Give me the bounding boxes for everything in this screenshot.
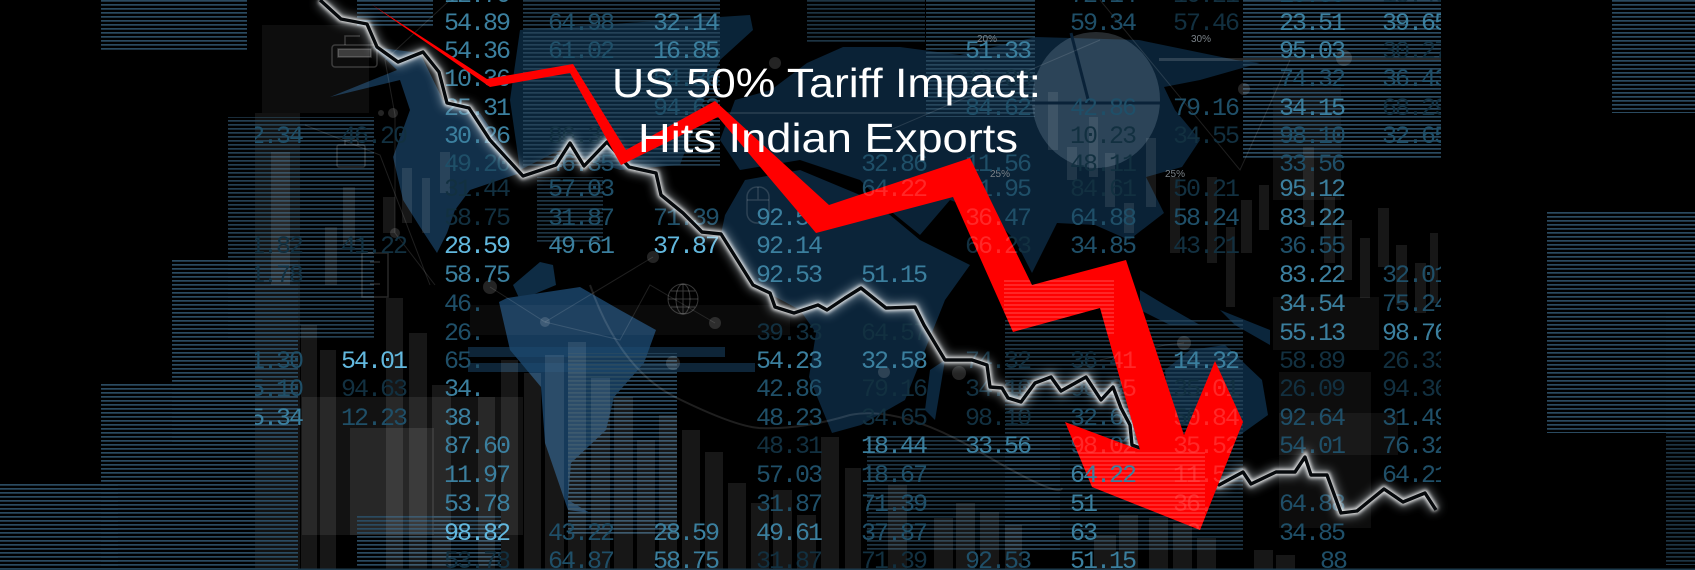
numbers column 5: 37.87 [653, 232, 719, 261]
numbers column 11: 34.54 [1279, 290, 1345, 319]
bottom edge line [0, 568, 1695, 570]
numbers column 7: 71.39 [861, 490, 927, 519]
numbers column 11: 33.56 [1279, 150, 1345, 179]
title [612, 60, 1041, 161]
numbers showing through arrow: 88.23 [1173, 519, 1239, 548]
numbers column 8: 51.33 [965, 37, 1031, 66]
numbers column 11: 34.85 [1279, 519, 1345, 548]
numbers column 10: 58.24 [1173, 204, 1239, 233]
numbers column 8: 84.62 [965, 94, 1031, 123]
numbers showing through arrow: 35.01 [1173, 375, 1239, 404]
icon: globe [668, 284, 698, 314]
numbers column 7: 34.65 [861, 404, 927, 433]
numbers column 4: 64.98 [548, 9, 614, 38]
numbers column 11: 74.32 [1279, 65, 1345, 94]
numbers column 11: 23.51 [1279, 9, 1345, 38]
numbers column 10: 50.84 [1173, 404, 1239, 433]
numbers showing through arrow: 96.35 [1070, 375, 1136, 404]
numbers showing through arrow: 36.47 [965, 204, 1031, 233]
numbers column 10: 35.01 [1173, 375, 1239, 404]
world map [330, 15, 1270, 513]
numbers showing through arrow: 36.27 [1173, 490, 1239, 519]
numbers column 9: 10.23 [1070, 122, 1136, 151]
numbers column 8: 66.23 [965, 232, 1031, 261]
numbers column 12 [1384, 13, 1441, 482]
numbers column 3: 65. [444, 347, 483, 376]
numbers column 7: 51.15 [861, 261, 927, 290]
pie chart circle [1032, 32, 1160, 168]
numbers column 12: 32.01 [1382, 261, 1448, 290]
numbers column 11: 26.09 [1279, 375, 1345, 404]
numbers column 1: 31.82 [237, 232, 303, 261]
numbers column 11: 55.13 [1279, 319, 1345, 348]
numbers column 3: 87.60 [444, 432, 510, 461]
numbers column 9: 42.86 [1070, 94, 1136, 123]
numbers column 11: 95.03 [1279, 37, 1345, 66]
numbers column 9: 96.35 [1070, 375, 1136, 404]
numbers column 1: 41.78 [237, 261, 303, 290]
percent labels [977, 34, 1211, 180]
numbers column 5: 54.36 [653, 65, 719, 94]
numbers column 6: 42.86 [756, 375, 822, 404]
numbers column 12: 26.33 [1382, 347, 1448, 376]
red falling arrow [371, 4, 1243, 530]
numbers column 10: 14.32 [1173, 347, 1239, 376]
numbers column 11: 36.55 [1279, 232, 1345, 261]
numbers column 3: 38. [444, 404, 483, 433]
numbers column 9: 32.65 [1070, 404, 1136, 433]
numbers column 12: 76.32 [1382, 432, 1448, 461]
numbers column 11 [1279, 9, 1347, 570]
numbers column 6 [756, 204, 822, 570]
black falling line [320, 0, 1436, 513]
numbers column 7: 32.86 [861, 150, 927, 179]
number table [237, 0, 1448, 570]
numbers column 9: 36.41 [1070, 347, 1136, 376]
numbers column 12: 30.27 [1382, 37, 1448, 66]
numbers column 5: 32.14 [653, 9, 719, 38]
numbers column 1 [255, 126, 303, 425]
numbers column 2: 41.22 [341, 232, 407, 261]
numbers column 4: 31.87 [548, 204, 614, 233]
numbers column 6: 92.14 [756, 232, 822, 261]
numbers column 4: 43.22 [548, 519, 614, 548]
numbers showing through arrow: 98.02 [1070, 432, 1136, 461]
numbers column 1: 65.10 [237, 375, 303, 404]
numbers column 3: 54.89 [444, 9, 510, 38]
numbers column 3: 31.44 [444, 175, 510, 204]
numbers column 9: 63 [1070, 519, 1097, 548]
outer glow of falling line [320, 0, 1436, 513]
numbers column 6: 49.61 [756, 519, 822, 548]
numbers column 10: 57.46 [1173, 9, 1239, 38]
numbers column 4: 46.35 [548, 150, 614, 179]
numbers column 12: 75.24 [1382, 290, 1448, 319]
numbers column 4 [548, 9, 614, 570]
numbers column 3: 98.82 [444, 519, 510, 548]
percent labels: 30% [1191, 34, 1211, 45]
numbers column 6: 39.33 [756, 319, 822, 348]
numbers column 2: 46.20 [341, 122, 407, 151]
numbers column 11: 92.64 [1279, 404, 1345, 433]
bar chart [271, 152, 1295, 570]
numbers column 4: 49.61 [548, 232, 614, 261]
numbers column 3: 46. [444, 290, 483, 319]
numbers column 10 [1173, 9, 1239, 433]
numbers column 2: 54.01 [341, 347, 407, 376]
numbers column 5: 28.59 [653, 519, 719, 548]
network lines and curve [305, 0, 1290, 490]
numbers column 6: 57.03 [756, 461, 822, 490]
numbers column 11: 34.15 [1279, 94, 1345, 123]
percent labels: 25% [990, 169, 1010, 180]
numbers column 8: 16.08 [965, 65, 1031, 94]
percent labels: 25% [1165, 169, 1185, 180]
title: Hits Indian Exports [638, 115, 1018, 161]
numbers showing through arrow: 11.52 [1173, 461, 1239, 490]
numbers showing through arrow: 66.23 [965, 232, 1031, 261]
numbers showing through arrow: 35.52 [1173, 432, 1239, 461]
numbers showing through arrow [861, 175, 1239, 548]
numbers column 3: 30.26 [444, 122, 510, 151]
title: US 50% Tariff Impact: [612, 60, 1041, 106]
numbers column 9: 34.85 [1070, 232, 1136, 261]
numbers column 9 [1070, 9, 1136, 570]
icon: keyboard [332, 36, 377, 67]
numbers column 5: 94.63 [653, 94, 719, 123]
numbers column 3: 49.20 [444, 150, 510, 179]
numbers column 9: 51 [1070, 490, 1097, 519]
white glow of falling line [320, 0, 1436, 513]
icon: device stack [362, 253, 388, 297]
numbers column 11: 83.22 [1279, 261, 1345, 290]
numbers column 3: 25.31 [444, 94, 510, 123]
numbers column 5 [653, 9, 719, 570]
numbers column 7: 18.67 [861, 461, 927, 490]
numbers column 8: 11.95 [965, 175, 1031, 204]
numbers column 8 [965, 37, 1031, 570]
numbers column 4: 61.02 [548, 37, 614, 66]
number over arrow: 64.22 [1070, 461, 1136, 490]
numbers column 7 [861, 150, 927, 570]
numbers column 7: 18.44 [861, 432, 927, 461]
numbers column 9: 84.61 [1070, 175, 1136, 204]
numbers column 12: 32.65 [1382, 122, 1448, 151]
numbers column 12: 68.29 [1382, 94, 1448, 123]
numbers column 1: 81.30 [237, 347, 303, 376]
icon: bag [337, 140, 365, 167]
numbers column 9: 48.11 [1070, 150, 1136, 179]
numbers showing through arrow: 64.22 [861, 175, 927, 204]
gray panels [255, 25, 1441, 570]
numbers column 3: 28.59 [444, 232, 510, 261]
numbers column 10: 34.55 [1173, 122, 1239, 151]
numbers column 5: 16.85 [653, 37, 719, 66]
numbers column 12: 98.76 [1382, 319, 1448, 348]
numbers column 3: 54.36 [444, 37, 510, 66]
candlestick chart [1048, 92, 1438, 313]
numbers column 11: 54.01 [1279, 432, 1345, 461]
icon: computer mouse [747, 187, 769, 223]
numbers column 3 [444, 9, 510, 570]
numbers column 8: 74.32 [965, 347, 1031, 376]
numbers column 6: 31.87 [756, 490, 822, 519]
numbers column 11: 58.89 [1279, 347, 1345, 376]
numbers column 8: 98.10 [965, 404, 1031, 433]
numbers column 9: 98.02 [1070, 432, 1136, 461]
numbers column 8: 33.56 [965, 432, 1031, 461]
numbers column 12: 94.36 [1382, 375, 1448, 404]
numbers column 9: 59.34 [1070, 9, 1136, 38]
numbers column 3: 10.36 [444, 65, 510, 94]
blue horizontal bands [468, 347, 755, 372]
numbers column 4: 57.03 [548, 175, 614, 204]
numbers column 3: 26. [444, 319, 483, 348]
numbers column 3: 58.75 [444, 261, 510, 290]
numbers column 8: 11.56 [965, 150, 1031, 179]
numbers column 11: 83.22 [1279, 204, 1345, 233]
numbers column 7: 64.22 [861, 175, 927, 204]
numbers column 4: 86.34 [548, 122, 614, 151]
percent labels: 20% [977, 34, 997, 45]
numbers top clipped row [446, 0, 1441, 2]
network nodes [378, 50, 1352, 380]
numbers column 5: 71.39 [653, 204, 719, 233]
numbers column 3: 58.75 [444, 204, 510, 233]
numbers column 6: 48.23 [756, 404, 822, 433]
numbers column 12: 64.21 [1382, 461, 1448, 490]
numbers column 10: 50.21 [1173, 175, 1239, 204]
numbers column 12: 39.65 [1382, 9, 1448, 38]
numbers column 9: 64.88 [1070, 204, 1136, 233]
numbers showing through arrow: 50.84 [1173, 404, 1239, 433]
numbers column 6: 54.23 [756, 347, 822, 376]
numbers column 3: 53.78 [444, 490, 510, 519]
numbers column 7: 32.58 [861, 347, 927, 376]
numbers column 3: 11.97 [444, 461, 510, 490]
numbers column 3: 34. [444, 375, 483, 404]
numbers column 12: 36.43 [1382, 65, 1448, 94]
numbers column 10: 43.21 [1173, 232, 1239, 261]
numbers column 6: 92.53 [756, 204, 822, 233]
numbers column 1: 42.34 [237, 122, 303, 151]
numbers column 6: 92.53 [756, 261, 822, 290]
numbers column 2: 12.23 [341, 404, 407, 433]
numbers column 11: 98.10 [1279, 122, 1345, 151]
numbers column 7: 37.87 [861, 519, 927, 548]
numbers column 7: 79.16 [861, 375, 927, 404]
numbers column 11: 64.88 [1279, 490, 1345, 519]
numbers column 2: 94.63 [341, 375, 407, 404]
numbers column 1: 85.34 [237, 404, 303, 433]
numbers column 6: 48.31 [756, 432, 822, 461]
numbers column 11: 95.12 [1279, 175, 1345, 204]
numbers column 12: 31.49 [1382, 404, 1448, 433]
numbers column 2 [341, 122, 407, 433]
numbers column 8: 34.10 [965, 375, 1031, 404]
numbers showing through arrow: 36.41 [1070, 347, 1136, 376]
stripes across arrow [1004, 280, 1205, 532]
numbers column 8: 36.47 [965, 204, 1031, 233]
numbers column 7: 64.57 [861, 319, 927, 348]
numbers column 10: 79.16 [1173, 94, 1239, 123]
